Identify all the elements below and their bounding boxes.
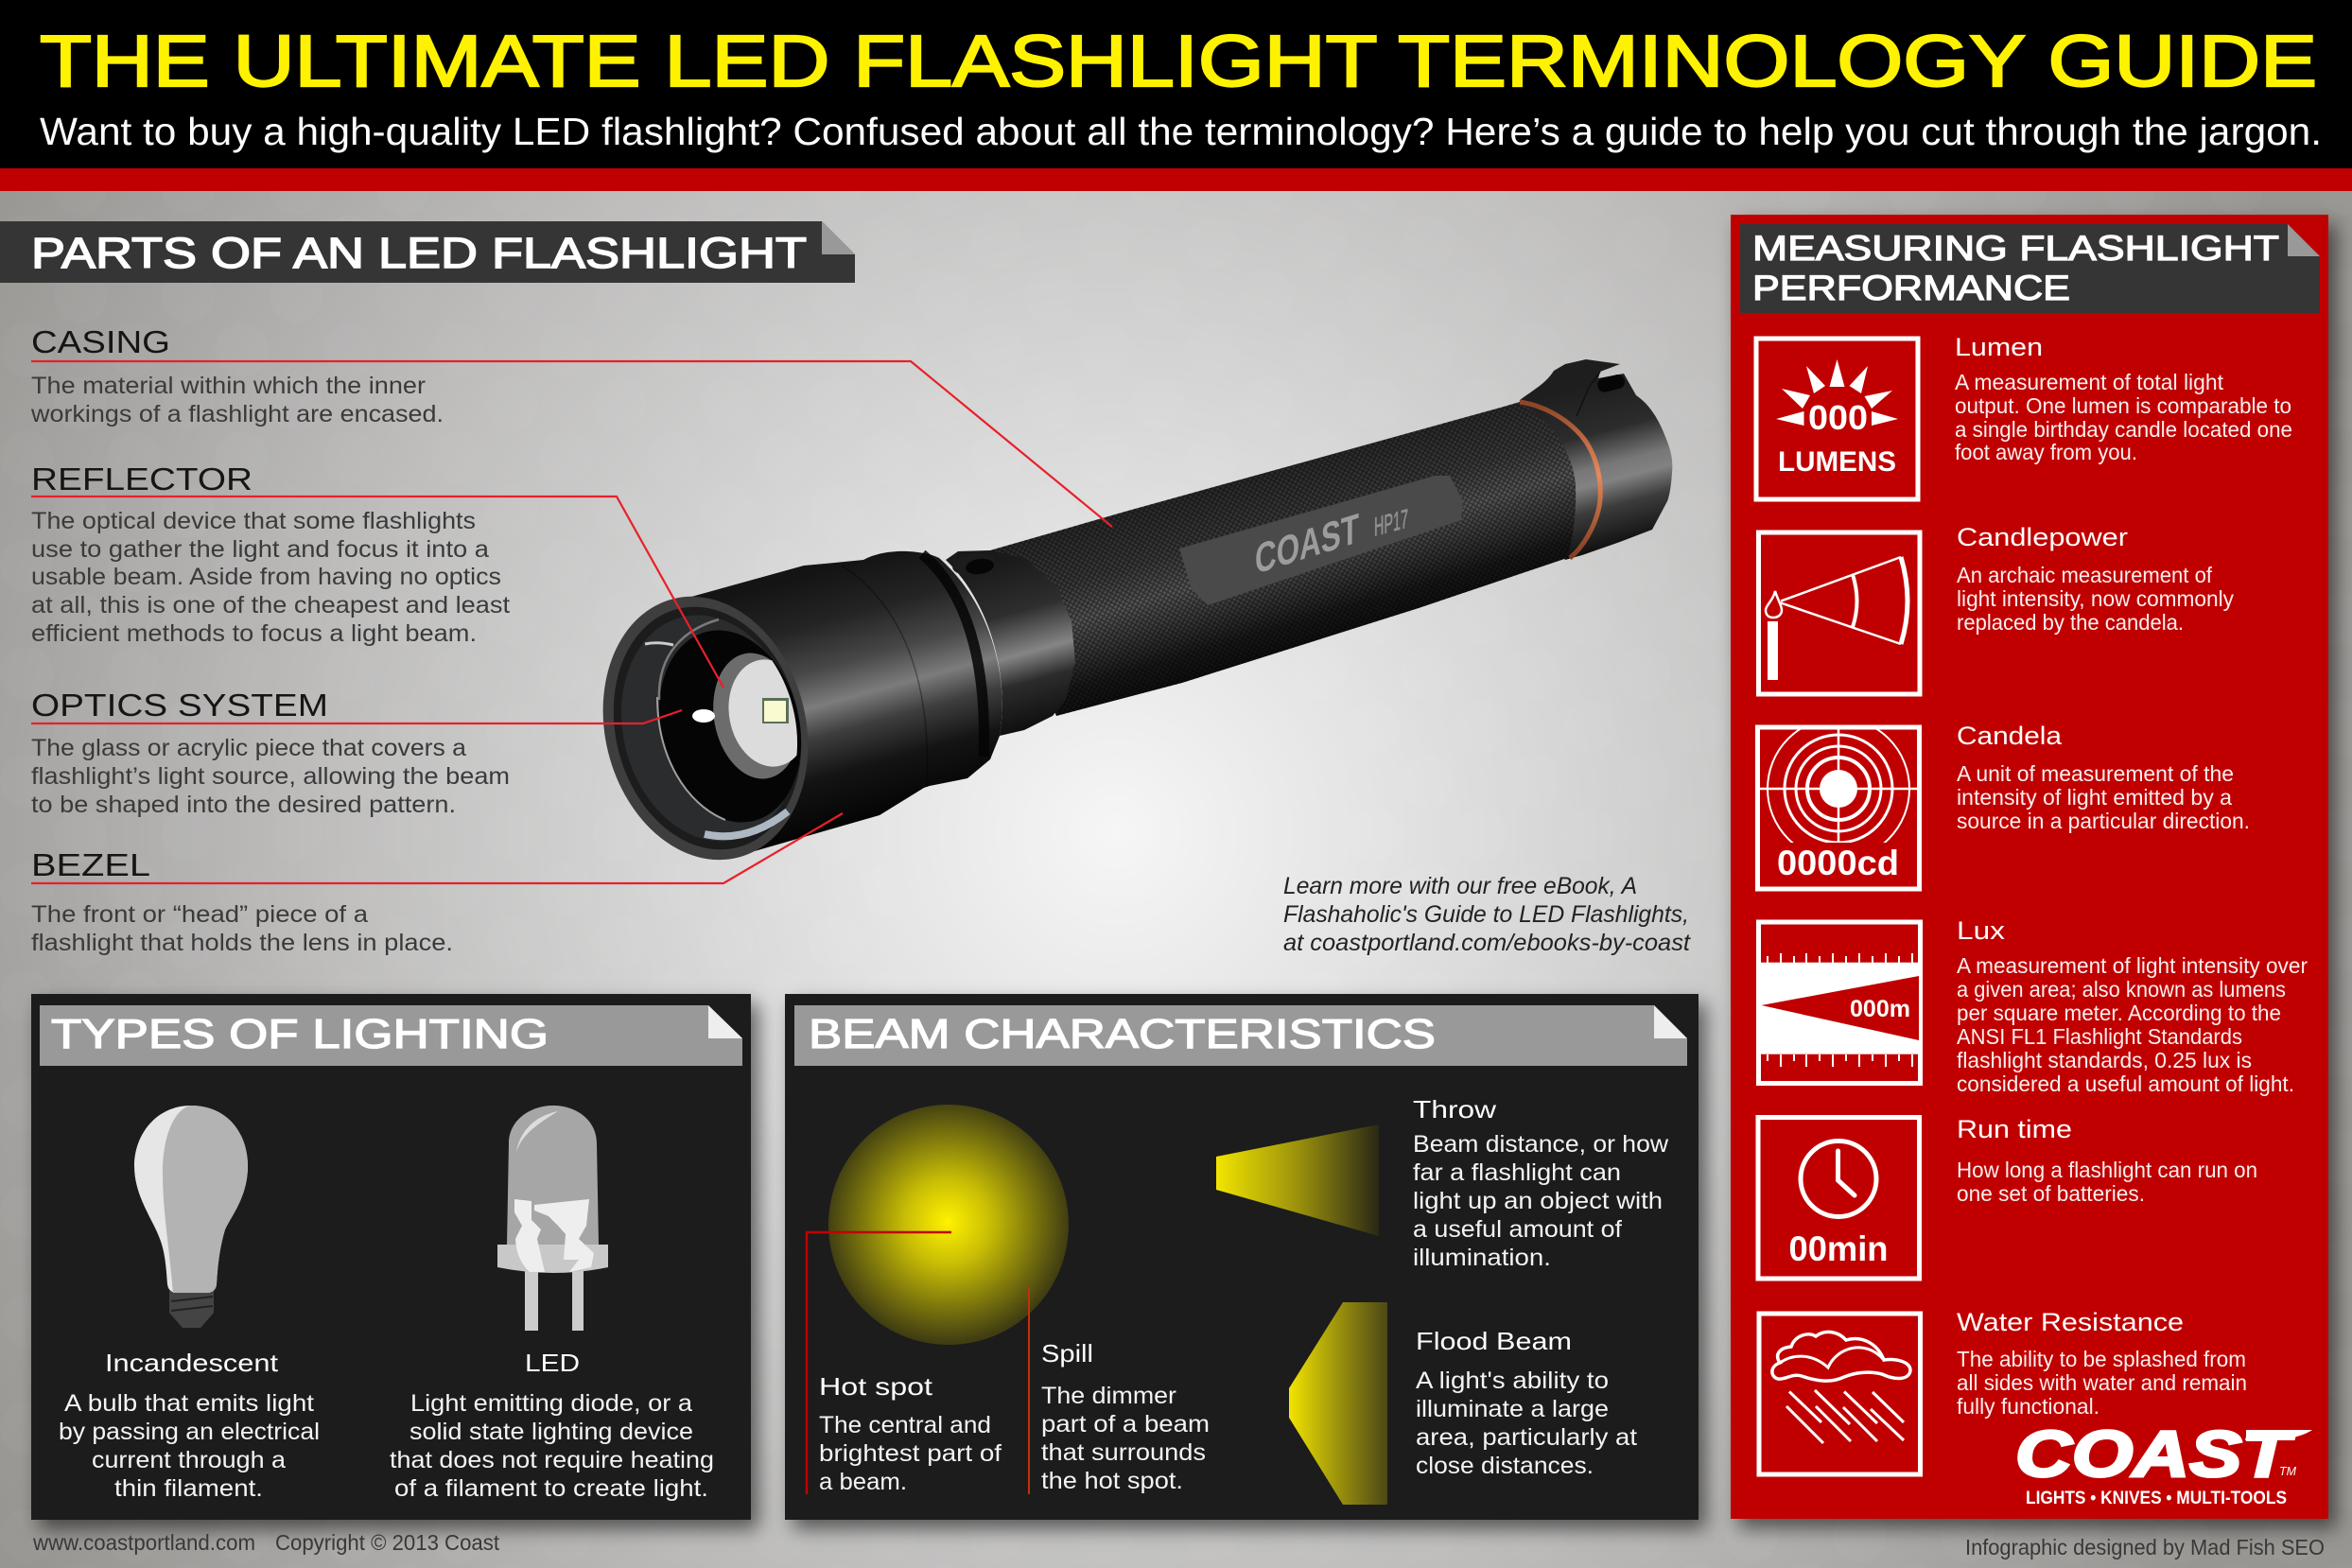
flood beam text: A light's ability to xyxy=(1416,1368,1609,1394)
callout: casing: The material within which the inner xyxy=(31,373,426,399)
heading band xyxy=(1740,224,2320,313)
text: water resistance: The ability to be splashed from xyxy=(1957,1347,2246,1371)
logo: Coast xyxy=(2015,1418,2312,1508)
flood beam text xyxy=(1416,1327,1637,1479)
text: incandescent: A bulb that emits light xyxy=(64,1390,314,1417)
grey label plate xyxy=(1179,476,1463,605)
icon: lux: 000m xyxy=(1850,996,1910,1022)
ebook note: at coastportland.com/ebooks-by-coast xyxy=(1283,930,1691,956)
text: incandescent: Incandescent xyxy=(105,1349,279,1377)
text: candela xyxy=(1957,722,2250,833)
text: incandescent: current through a xyxy=(92,1447,286,1473)
heading band xyxy=(794,1005,1687,1066)
callout: optics system: flashlight’s light source, allowing the beam xyxy=(31,763,510,790)
text: lumen xyxy=(1955,333,2292,464)
knurled barrel xyxy=(990,402,1576,716)
text: lux: flashlight standards, 0.25 lux is xyxy=(1957,1048,2252,1072)
text: water resistance: fully functional. xyxy=(1957,1394,2099,1419)
text: LED: Light emitting diode, or a xyxy=(410,1390,692,1417)
text: run time: How long a flashlight can run on xyxy=(1957,1158,2257,1182)
hot spot callout xyxy=(807,1232,1002,1495)
text: incandescent: by passing an electrical xyxy=(59,1419,320,1445)
throw text: light up an object with xyxy=(1413,1188,1663,1214)
hot spot callout: a beam. xyxy=(819,1469,907,1495)
ebook note xyxy=(1283,873,1691,956)
callout: optics system: to be shaped into the desired pattern. xyxy=(31,792,456,818)
callout: reflector: use to gather the light and focus it into a xyxy=(31,536,489,563)
callout: bezel xyxy=(31,813,843,956)
text: LED: LED xyxy=(525,1349,580,1377)
spill callout: the hot spot. xyxy=(1041,1468,1183,1494)
subtitle: Want to buy a high-quality LED flashlight? Confused about all the terminology? Here’s a guide to help you cut through the jargon. xyxy=(40,110,2322,153)
callout: reflector: at all, this is one of the cheapest and least xyxy=(31,592,510,618)
text: candela: Candela xyxy=(1957,722,2063,750)
throw text: far a flashlight can xyxy=(1413,1159,1621,1186)
panel: measuring flashlight performance xyxy=(1731,215,2328,1519)
callout: reflector xyxy=(31,462,723,688)
flood beam text: Flood Beam xyxy=(1416,1327,1572,1355)
icon: lumens xyxy=(1756,339,1918,499)
beam spot illustration xyxy=(828,1105,1069,1345)
throw beam shape xyxy=(1216,1124,1379,1236)
icon: incandescent bulb xyxy=(134,1106,248,1328)
collar screw xyxy=(951,551,997,578)
heading band: PERFORMANCE xyxy=(1752,269,2070,307)
bezel rim xyxy=(576,575,835,881)
text: water resistance: all sides with water and remain xyxy=(1957,1370,2247,1395)
text: candela: A unit of measurement of the xyxy=(1957,761,2234,786)
lens glass xyxy=(598,597,821,860)
logo: Coast: LIGHTS • KNIVES • MULTI-TOOLS xyxy=(2026,1489,2287,1508)
text: LED: that does not require heating xyxy=(390,1447,714,1473)
callout: optics system xyxy=(31,688,682,818)
text: lux: Lux xyxy=(1957,916,2006,945)
text: incandescent xyxy=(59,1349,320,1502)
callout: bezel: flashlight that holds the lens in place. xyxy=(31,930,453,956)
text: lux: A measurement of light intensity over xyxy=(1957,953,2308,978)
text: lux: ANSI FL1 Flashlight Standards xyxy=(1957,1024,2242,1049)
inner reflector xyxy=(639,615,821,838)
text: LED: of a filament to create light. xyxy=(394,1475,708,1502)
footer: website and copyright xyxy=(32,1530,500,1555)
text: LED xyxy=(390,1349,714,1502)
throw text: Beam distance, or how xyxy=(1413,1131,1669,1158)
callout: optics system: OPTICS SYSTEM xyxy=(31,688,328,723)
text: lux: considered a useful amount of light. xyxy=(1957,1071,2294,1096)
icon: lumens: 000 xyxy=(1808,398,1868,437)
spill callout: that surrounds xyxy=(1041,1439,1206,1466)
text: run time xyxy=(1957,1115,2257,1206)
section heading: parts of an LED flashlight: PARTS OF AN LED FLASHLIGHT xyxy=(31,229,807,277)
text: run time: Run time xyxy=(1957,1115,2072,1143)
callout: casing: CASING xyxy=(31,324,170,359)
text: lumen: foot away from you. xyxy=(1955,440,2137,464)
text: lumen: Lumen xyxy=(1955,333,2043,361)
throw text xyxy=(1413,1095,1669,1271)
glass highlights xyxy=(645,619,788,836)
flood beam text: illuminate a large xyxy=(1416,1396,1609,1422)
text: candlepower: An archaic measurement of xyxy=(1957,563,2213,587)
LED module xyxy=(713,653,798,779)
grey label plate: HP17 xyxy=(1374,504,1408,543)
icon: water resistance xyxy=(1759,1314,1920,1474)
text: lumen: a single birthday candle located one xyxy=(1955,417,2292,442)
text: lumen: output. One lumen is comparable to xyxy=(1955,393,2291,418)
flange groove xyxy=(922,554,984,757)
text: lux xyxy=(1957,916,2308,1096)
panel: types of lighting xyxy=(31,994,751,1520)
text: candlepower: light intensity, now commonly xyxy=(1957,586,2234,611)
callout: bezel: BEZEL xyxy=(31,847,150,882)
hot spot callout: Hot spot xyxy=(819,1372,933,1401)
icon: LED xyxy=(497,1106,608,1331)
text: candlepower xyxy=(1957,523,2234,635)
footer: designer credit: Infographic designed by Mad Fish SEO xyxy=(1965,1535,2325,1559)
ebook note: Flashaholic's Guide to LED Flashlights, xyxy=(1283,901,1689,928)
icon: lumens: LUMENS xyxy=(1778,446,1896,478)
icon: candlepower xyxy=(1759,532,1920,694)
icon: run time clock: 00min xyxy=(1789,1229,1888,1268)
text: incandescent: thin filament. xyxy=(114,1475,263,1502)
title: THE ULTIMATE LED FLASHLIGHT TERMINOLOGY GUIDE xyxy=(40,21,2317,102)
callout: casing: workings of a flashlight are encased. xyxy=(30,401,444,427)
text: candlepower: Candlepower xyxy=(1957,523,2128,551)
spill callout: The dimmer xyxy=(1041,1383,1176,1409)
text: candela: intensity of light emitted by a xyxy=(1957,785,2232,810)
head seam xyxy=(842,566,928,787)
flood beam text: area, particularly at xyxy=(1416,1424,1637,1451)
flashlight photo illustration xyxy=(576,359,1672,881)
flood beam shape xyxy=(1289,1302,1387,1505)
lug seam xyxy=(1577,372,1600,416)
icon: run time clock xyxy=(1758,1118,1920,1279)
icon: candela xyxy=(1757,718,1920,889)
logo: Coast: TM xyxy=(2279,1464,2296,1478)
heading band: MEASURING FLASHLIGHT xyxy=(1752,229,2279,268)
throw text: a useful amount of xyxy=(1413,1216,1622,1243)
heading band: TYPES OF LIGHTING xyxy=(51,1011,549,1057)
callout: bezel: The front or “head” piece of a xyxy=(31,901,368,928)
icon: candela: 0000cd xyxy=(1777,844,1899,882)
icon: lux xyxy=(1759,922,1920,1084)
text: lumen: A measurement of total light xyxy=(1955,370,2224,394)
flood beam text: close distances. xyxy=(1416,1453,1594,1479)
heading band xyxy=(40,1005,742,1066)
lanyard slot xyxy=(1596,374,1626,393)
spill callout xyxy=(1029,1287,1210,1494)
footer: website and copyright: www.coastportland.com xyxy=(32,1530,255,1555)
panel: beam characteristics xyxy=(785,994,1699,1520)
lens reflection xyxy=(692,709,715,723)
footer: website and copyright: Copyright © 2013 Coast xyxy=(275,1530,500,1555)
callout: casing xyxy=(30,324,1112,527)
callout: reflector: usable beam. Aside from having no optics xyxy=(31,564,501,590)
logo: Coast: COAST xyxy=(2015,1418,2295,1490)
text: lux: per square meter. According to the xyxy=(1957,1001,2281,1025)
hot spot callout: The central and xyxy=(819,1412,991,1438)
hot spot callout: brightest part of xyxy=(819,1440,1002,1467)
callout: reflector: efficient methods to focus a light beam. xyxy=(31,620,477,647)
section heading: parts of an LED flashlight xyxy=(0,221,855,283)
header banner xyxy=(0,0,2352,191)
text: candela: source in a particular direction. xyxy=(1957,809,2250,833)
callout: optics system: The glass or acrylic piece that covers a xyxy=(31,735,466,761)
collar xyxy=(946,550,1075,736)
grey label plate: COAST xyxy=(1255,504,1359,584)
ebook note: Learn more with our free eBook, A xyxy=(1283,873,1637,899)
spill callout: Spill xyxy=(1041,1339,1093,1368)
throw text: illumination. xyxy=(1413,1245,1551,1271)
tail cap xyxy=(1513,359,1672,560)
text: water resistance: Water Resistance xyxy=(1957,1308,2184,1336)
heading band: BEAM CHARACTERISTICS xyxy=(809,1011,1436,1057)
spill callout: part of a beam xyxy=(1041,1411,1210,1437)
text: LED: solid state lighting device xyxy=(409,1419,693,1445)
throw text: Throw xyxy=(1413,1095,1496,1124)
callout: reflector: REFLECTOR xyxy=(31,462,253,497)
head xyxy=(674,551,1002,859)
text: run time: one set of batteries. xyxy=(1957,1181,2145,1206)
text: candlepower: replaced by the candela. xyxy=(1957,610,2184,635)
text: lux: a given area; also known as lumens xyxy=(1957,977,2286,1002)
text: water resistance xyxy=(1957,1308,2247,1419)
callout: reflector: The optical device that some flashlights xyxy=(31,508,476,534)
copper ring xyxy=(1520,402,1600,558)
